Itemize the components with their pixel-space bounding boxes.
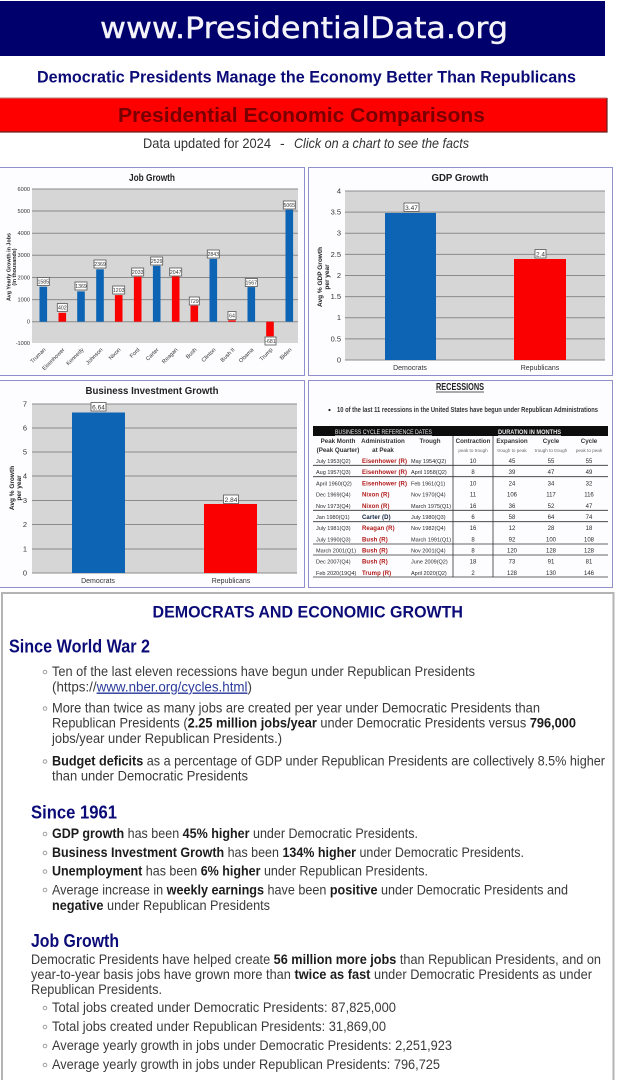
table rows: recession dates and durations: 108 (584, 537, 595, 543)
table rows: recession dates and durations: July 1953(Q2) (316, 459, 351, 465)
table rows: recession dates and durations: Reagan (R) (362, 526, 395, 532)
plot: job growth bars: 5065 (284, 203, 295, 209)
table rows: recession dates and durations: 16 (470, 526, 477, 532)
block: job growth: year-to-year basis jobs have grown more than twice as fast under Democratic Presidents as under (31, 966, 592, 982)
table rows: recession dates and durations: 73 (509, 559, 516, 565)
plot: job growth bars: 2047 (170, 270, 182, 276)
table header band: DURATION IN MONTHS (498, 429, 562, 436)
plot: job growth bars: 4000 (18, 231, 30, 237)
plot: job growth bars: 64 (229, 314, 235, 320)
category labels: presidents: Trump (259, 347, 274, 363)
axis label: gdp growth: Avg % GDP Growth (317, 247, 324, 307)
table rows: recession dates and durations: July 1990(Q3) (316, 537, 351, 543)
table rows: recession dates and durations: 128 (546, 548, 557, 554)
data updated note: Click on a chart to see the facts (294, 135, 469, 151)
table rows: recession dates and durations: 52 (548, 504, 555, 510)
table rows: recession dates and durations: 128 (584, 548, 595, 554)
category labels: presidents: Biden (279, 347, 293, 362)
plot: job growth bars (16, 187, 298, 347)
table rows: recession dates and durations: 36 (509, 504, 516, 510)
block: since world war 2: jobs/year under Republican Presidents.) (51, 730, 282, 746)
block: since world war 2 (9, 636, 605, 784)
table rows: recession dates and durations: 55 (586, 459, 593, 465)
table column headings: peak to trough (458, 448, 488, 453)
category labels: presidents: Clinton (201, 347, 217, 364)
category labels: presidents (30, 347, 293, 372)
block: job growth (31, 931, 601, 1072)
table rows: recession dates and durations: 74 (586, 515, 593, 521)
table rows: recession dates and durations: 11 (470, 493, 477, 499)
table rows: recession dates and durations: 91 (548, 559, 555, 565)
category labels: presidents: Nixon (108, 347, 122, 362)
block: since 1961: Unemployment has been 6% higher under Republican Presidents. (52, 862, 428, 878)
plot: job growth bars: 402 (58, 306, 67, 312)
table rows: recession dates and durations: Feb 2020(19Q4) (316, 571, 357, 577)
table header band (313, 426, 608, 436)
table rows: recession dates and durations: 45 (509, 459, 516, 465)
table rows: recession dates and durations: 58 (509, 515, 516, 521)
block: since 1961: Business Investment Growth has been 134% higher under Democratic Presidents. (52, 844, 524, 860)
table rows: recession dates and durations: Aug 1957(Q3) (316, 470, 351, 476)
table column headings: Trough (420, 438, 441, 445)
plot: investment growth bars: 7 (23, 400, 27, 408)
panel: gdp growth chart (308, 167, 613, 376)
plot: job growth bars: 1567 (246, 280, 257, 286)
table rows: recession dates and durations: March 2001(Q1) (316, 548, 356, 554)
category labels: presidents: Obama (238, 347, 256, 364)
table rows: recession dates and durations: Bush (R) (362, 537, 388, 543)
table rows: recession dates and durations: 92 (509, 537, 516, 543)
chart title: business investment growth: Business Investment Growth (86, 385, 218, 397)
table rows: recession dates and durations: 34 (548, 481, 555, 487)
block: since world war 2: Since World War 2 (9, 636, 150, 656)
table rows: recession dates and durations: 10 (470, 459, 477, 465)
plot: investment growth bars: Democrats (81, 578, 115, 585)
table rows: recession dates and durations: 81 (586, 559, 593, 565)
category labels: presidents: Ford (129, 347, 141, 360)
table rows: recession dates and durations: 6 (471, 515, 475, 521)
plot: gdp growth bars: 2.5 (331, 250, 341, 259)
table rows: recession dates and durations: 49 (586, 470, 593, 476)
table rows: recession dates and durations: 146 (584, 571, 595, 577)
table rows: recession dates and durations: Nov 1970(Q4) (411, 493, 446, 499)
panel: democrats and economic growth (2, 593, 614, 1080)
table column headings: peak to peak (576, 448, 603, 453)
plot: investment growth bars: 6.64 (92, 404, 105, 412)
plot: investment growth bars: 4 (23, 472, 27, 480)
data updated note (143, 135, 469, 151)
table rows: recession dates and durations: 16 (470, 504, 477, 510)
axis label: investment growth (9, 466, 23, 510)
plot: job growth bars: 1369 (75, 284, 87, 290)
table rows: recession dates and durations: 128 (507, 571, 518, 577)
table rows: recession dates and durations: March 1975(Q1) (411, 504, 451, 510)
plot: gdp growth bars: 3 (337, 229, 341, 238)
table rows: recession dates and durations: April 2020(Q2) (411, 571, 447, 577)
table rows: recession dates and durations: Nixon (R) (362, 504, 390, 510)
table rows: recession dates and durations: 12 (509, 526, 516, 532)
plot: job growth bars: 1000 (18, 298, 30, 304)
table rows: recession dates and durations: Nov 1982(Q4) (411, 526, 446, 532)
table rows: recession dates and durations: 8 (471, 537, 475, 543)
plot: job growth bars: 1585 (38, 280, 49, 286)
table column headings: (Peak Quarter) (317, 447, 359, 454)
plot: gdp growth bars: 1.5 (331, 292, 341, 301)
plot: gdp growth bars: 3.47 (405, 205, 418, 212)
axis label: job growth (6, 233, 18, 301)
block: since 1961: GDP growth has been 45% higher under Democratic Presidents. (52, 825, 418, 841)
red banner: presidential economic comparisons: Presidential Economic Comparisons (118, 105, 485, 127)
data updated note: Data updated for 2024 (143, 135, 271, 151)
table rows: recession dates and durations: 18 (586, 526, 593, 532)
plot: investment growth bars: Republicans (212, 578, 251, 585)
table column headings: Administration (361, 438, 405, 445)
plot: investment growth bars: 5 (23, 448, 27, 456)
block: job growth: Democratic Presidents have helped create 56 million more jobs than Republican Presidents, and on (31, 951, 601, 967)
plot: investment growth bars: 2.84 (225, 497, 238, 504)
block: job growth: Average yearly growth in jobs under Democratic Presidents: 2,251,923 (52, 1037, 452, 1053)
block: since 1961: Average increase in weekly earnings have been positive under Democratic Presidents and (52, 882, 568, 898)
plot: job growth bars: 2000 (18, 276, 30, 282)
table rows: recession dates and durations: 55 (548, 459, 555, 465)
block: since 1961: negative under Republican Presidents (52, 897, 270, 913)
block: job growth: Job Growth (31, 931, 119, 951)
table rows: recession dates and durations: June 2009(Q2) (411, 559, 448, 565)
plot: gdp growth bars: 3.5 (331, 208, 341, 216)
axis label: gdp growth (317, 247, 331, 307)
plot: job growth bars: 729 (190, 299, 199, 305)
plot: gdp growth bars: 2 (337, 271, 341, 280)
plot: gdp growth bars: Democrats (393, 365, 427, 372)
recessions heading: RECESSIONS (436, 382, 484, 393)
table rows: recession dates and durations: 2 (471, 571, 475, 577)
panel: job growth chart (0, 167, 305, 376)
block: since 1961 (31, 802, 568, 913)
table column headings: Cycle (543, 438, 560, 445)
chart title: gdp growth: GDP Growth (432, 172, 488, 184)
plot: investment growth bars: 3 (23, 496, 27, 505)
table rows: recession dates and durations: Carter (D) (362, 515, 391, 521)
table rows: recession dates and durations (316, 459, 595, 577)
panel: recessions table (308, 380, 613, 588)
table rows: recession dates and durations: Trump (R) (362, 571, 391, 577)
table rows: recession dates and durations: 120 (507, 548, 518, 554)
block: since world war 2: More than twice as many jobs are created per year under Democratic Presidents than (52, 700, 540, 716)
axis label: job growth: Avg Yearly Growth in Jobs (6, 233, 12, 301)
table rows: recession dates and durations: 18 (470, 559, 477, 565)
plot: job growth bars: 1203 (113, 288, 125, 294)
plot: job growth bars: 2033 (132, 270, 144, 276)
table rows: recession dates and durations: Bush (R) (362, 548, 388, 554)
plot: job growth bars: -681 (265, 339, 276, 345)
table column headings: trough to peak (497, 448, 527, 453)
plot: investment growth bars: 0 (23, 568, 27, 578)
data updated note: - (280, 135, 285, 151)
section title: DEMOCRATS AND ECONOMIC GROWTH (152, 604, 463, 622)
table rows: recession dates and durations: 28 (548, 526, 555, 532)
plot: gdp growth bars: 4 (337, 186, 341, 196)
red banner: presidential economic comparisons (0, 98, 607, 132)
plot: gdp growth bars: 0.5 (331, 334, 341, 343)
table rows: recession dates and durations: 47 (586, 504, 593, 510)
table column headings: Peak Month (321, 438, 356, 445)
plot: gdp growth bars: Republicans (521, 365, 560, 372)
table rows: recession dates and durations: Nov 2001(Q4) (411, 548, 446, 554)
axis label: gdp growth: per year (324, 264, 331, 290)
table rows: recession dates and durations: Jan 1980(Q1) (316, 515, 350, 521)
chart title: job growth: Job Growth (129, 172, 175, 184)
panel: business investment growth chart (0, 380, 305, 588)
category labels: presidents: Johnson (85, 347, 104, 366)
category labels: presidents: Kennedy (66, 347, 86, 367)
category labels: presidents: Reagan (161, 347, 179, 365)
table rows: recession dates and durations: 8 (471, 470, 475, 476)
table rules (313, 436, 608, 577)
axis label: investment growth: per year (16, 475, 23, 501)
table rows: recession dates and durations: July 1981(Q3) (316, 526, 351, 532)
table rows: recession dates and durations: Bush (R) (362, 559, 388, 565)
plot: job growth bars: 6000 (18, 187, 30, 193)
table rows: recession dates and durations: Eisenhower (R) (362, 481, 407, 487)
plot: job growth bars: 2529 (151, 259, 163, 265)
table rows: recession dates and durations: Nixon (R) (362, 493, 390, 499)
table rows: recession dates and durations: Feb 1961(Q1) (411, 481, 445, 487)
block: since world war 2: (https://www.nber.org/cycles.html) (52, 678, 252, 694)
plot: investment growth bars: 1 (23, 544, 27, 554)
plot: job growth bars: 3000 (18, 253, 30, 259)
plot: gdp growth bars: 2.4 (536, 252, 545, 258)
block: since 1961: Since 1961 (31, 802, 117, 822)
block: job growth: Total jobs created under Democratic Presidents: 87,825,000 (52, 999, 396, 1015)
plot: job growth bars: 5000 (18, 209, 30, 215)
plot: investment growth bars: 6 (23, 424, 27, 432)
table rows: recession dates and durations: April 1958(Q2) (411, 470, 447, 476)
table rows: recession dates and durations: Dec 1969(Q4) (316, 493, 351, 499)
category labels: presidents: Carter (145, 347, 161, 362)
table rows: recession dates and durations: 8 (471, 548, 475, 554)
headline: Democratic Presidents Manage the Economy Better Than Republicans (37, 68, 576, 86)
plot: investment growth bars (23, 400, 297, 585)
table rows: recession dates and durations: July 1980(Q3) (411, 515, 446, 521)
table rows: recession dates and durations: April 1960(Q2) (316, 481, 352, 487)
table rows: recession dates and durations: 116 (584, 493, 594, 499)
category labels: presidents: Eisenhower (41, 347, 67, 372)
category labels: presidents: Bush (185, 347, 198, 360)
table rows: recession dates and durations: 39 (509, 470, 516, 476)
table rows: recession dates and durations: 24 (509, 481, 516, 487)
table rows: recession dates and durations: 106 (507, 493, 518, 499)
axis label: investment growth: Avg % Growth (9, 466, 16, 510)
table rows: recession dates and durations: 10 (470, 481, 477, 487)
block: job growth: Republican Presidents. (31, 981, 162, 997)
block: job growth: Total jobs created under Republican Presidents: 31,869,00 (52, 1018, 386, 1034)
axis label: job growth: (in thousands) (12, 248, 18, 286)
block: since world war 2: than under Democratic Presidents (52, 768, 248, 784)
table column headings: Expansion (496, 438, 528, 445)
plot: investment growth bars: 2 (23, 520, 27, 529)
plot: gdp growth bars (331, 186, 605, 372)
table rows: recession dates and durations: Nov 1973(Q4) (316, 504, 351, 510)
plot: job growth bars: -1000 (16, 341, 30, 347)
table column headings (317, 438, 603, 454)
table rows: recession dates and durations: Dec 2007(Q4) (316, 559, 351, 565)
table rows: recession dates and durations: 117 (546, 493, 556, 499)
block: job growth: Average yearly growth in jobs under Republican Presidents: 796,725 (52, 1056, 440, 1072)
block: since world war 2: Ten of the last eleven recessions have begun under Republican Presidents (52, 663, 475, 679)
table rows: recession dates and durations: May 1954(Q2) (411, 459, 446, 465)
plot: job growth bars: 2843 (208, 252, 219, 258)
plot: job growth bars: 0 (27, 320, 30, 326)
banner: site name (0, 1, 605, 56)
table rows: recession dates and durations: Eisenhower (R) (362, 470, 407, 476)
block: since world war 2: Republican Presidents (2.25 million jobs/year under Democratic Presidents versus 796,000 (52, 714, 576, 730)
table column headings: trough to trough (535, 448, 568, 453)
category labels: presidents: Bush II (220, 347, 237, 364)
table rows: recession dates and durations: 64 (548, 515, 555, 521)
category labels: presidents: Truman (30, 347, 47, 365)
table column headings: Cycle (581, 438, 598, 445)
plot: gdp growth bars: 1 (337, 313, 341, 322)
table column headings: Contraction (456, 438, 491, 445)
table header band: BUSINESS CYCLE REFERENCE DATES (335, 429, 433, 436)
table rows: recession dates and durations: 32 (586, 481, 593, 487)
table rows: recession dates and durations: Eisenhower (R) (362, 459, 407, 465)
table column headings: at Peak (372, 447, 394, 454)
banner: site name: www.PresidentialData.org (100, 11, 508, 45)
table rows: recession dates and durations: 100 (546, 537, 557, 543)
table rows: recession dates and durations: 47 (548, 470, 555, 476)
plot: job growth bars: 2369 (94, 262, 106, 268)
table rows: recession dates and durations: 130 (546, 571, 557, 577)
table rows: recession dates and durations: March 1991(Q1) (411, 537, 451, 543)
plot: gdp growth bars: 0 (337, 356, 341, 364)
